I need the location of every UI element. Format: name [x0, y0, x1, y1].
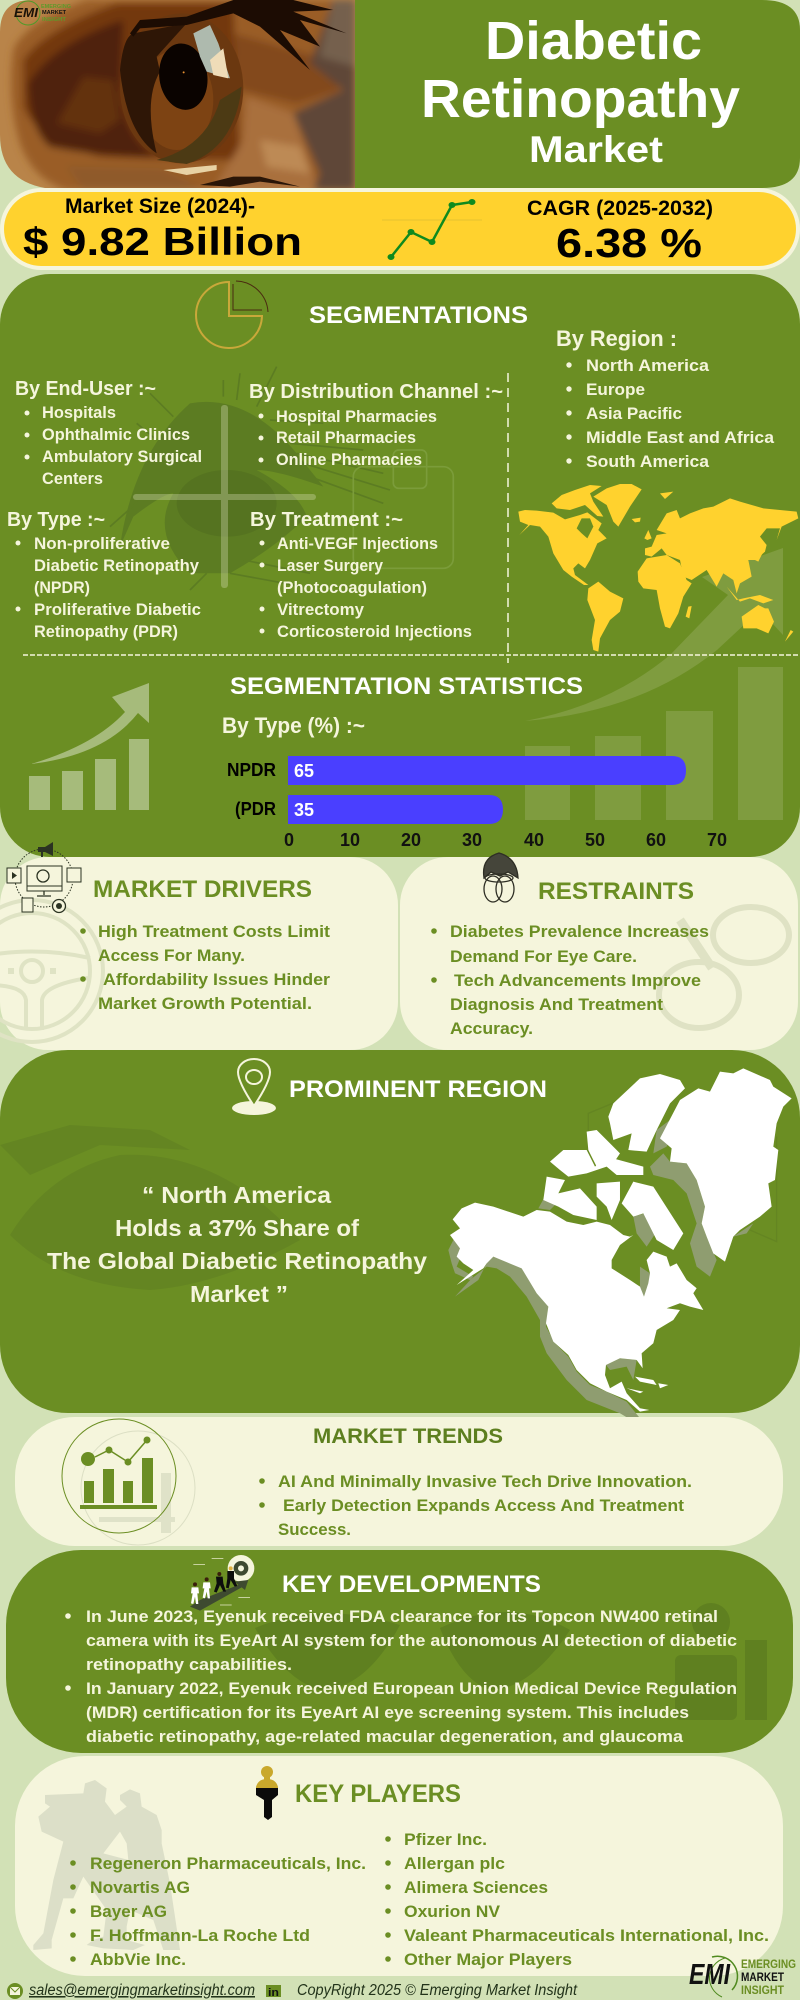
logo: Emerging Market Insight: EMI [689, 1959, 731, 1991]
watermark: steering wheel [0, 900, 103, 1042]
watermark: outlines [588, 1102, 777, 1242]
panel: market trends [15, 1417, 783, 1546]
list: players right column [385, 1830, 769, 1969]
bar chart: by type: 0 [284, 830, 294, 850]
bar chart: by type: 30 [462, 830, 482, 850]
watermark: eyes and bulb [255, 1603, 767, 1720]
icon: pie chart [196, 281, 268, 348]
bar chart: by type: 60 [646, 830, 666, 850]
bar chart: by type: 20 [401, 830, 421, 850]
list: by end-user: Hospitals [42, 403, 116, 422]
icon: growth bars and arrow [29, 683, 149, 810]
list: by type: (NPDR) [34, 578, 90, 597]
list: developments: In January 2022, Eyenuk received European Union Medical Device Regulation [86, 1679, 737, 1698]
list: players left column [70, 1854, 366, 1969]
bar chart: by type: NPDR [227, 760, 276, 780]
heading: segmentations: SEGMENTATIONS [309, 302, 528, 329]
list: by type: Retinopathy (PDR) [34, 622, 178, 641]
small logo on eye image: MARKET [42, 10, 67, 16]
small logo on eye image: INSIGHT [42, 17, 67, 23]
list: trends: Early Detection Expands Access And Treatment [283, 1496, 684, 1515]
list: by distribution channel: Retail Pharmacies [276, 428, 416, 447]
heading: market trends: MARKET TRENDS [313, 1425, 503, 1448]
panel: market size and CAGR banner [0, 188, 800, 270]
CAGR: CAGR (2025-2032) [527, 197, 713, 220]
list: restraints [431, 922, 709, 1038]
small logo on eye image: EMERGING [41, 4, 71, 10]
small logo on eye image: EMI [14, 5, 38, 20]
copyright: CopyRight 2025 © Emerging Market Insight [297, 1982, 578, 1999]
iris highlight [193, 25, 230, 78]
watermark: handcuffs [659, 907, 789, 1028]
list: by treatment: (Photocoagulation) [277, 578, 427, 597]
icon: marketing [7, 842, 81, 912]
panel: key players [15, 1756, 783, 1976]
map: North America [448, 1068, 792, 1418]
list: by type: Diabetic Retinopathy [34, 556, 200, 575]
subheading: by type: By Type (%) :~ [222, 713, 365, 738]
callout: share: Market ” [190, 1281, 288, 1307]
heading: market drivers: MARKET DRIVERS [93, 876, 312, 903]
watermark: eye [0, 1125, 300, 1290]
panel: prominent region [0, 1050, 800, 1418]
bar chart: by type: 70 [707, 830, 727, 850]
watermark: eye [110, 367, 453, 590]
header image: eye photograph [0, 0, 355, 190]
list: by end-user: Ophthalmic Clinics [42, 425, 190, 444]
heading: restraints: RESTRAINTS [538, 878, 694, 905]
list: by treatment: Anti-VEGF Injections [277, 534, 438, 553]
heading: key developments: KEY DEVELOPMENTS [282, 1571, 541, 1598]
icon: people climbing to target [190, 1555, 254, 1611]
list: players right column: Alimera Sciences [404, 1878, 548, 1897]
CAGR: 6.38 % [556, 220, 702, 266]
list: by region: Asia Pacific [586, 404, 682, 423]
list: by distribution channel [249, 381, 503, 469]
list: restraints: Accuracy. [450, 1019, 533, 1038]
icon: bar chart in circle [62, 1419, 195, 1545]
panel: key developments [6, 1550, 793, 1753]
bar chart: by type: (PDR [235, 799, 276, 819]
list: by type: Proliferative Diabetic [34, 600, 201, 619]
logo: Emerging Market Insight [689, 1956, 796, 1997]
list: players right column: Other Major Players [404, 1950, 572, 1969]
title text: Market [529, 129, 663, 170]
list: by type: By Type :~ [7, 509, 105, 531]
list: trends: Success. [278, 1520, 351, 1539]
email address: sales@emergingmarketinsight.com [29, 1982, 255, 1999]
bar chart: by type: 50 [585, 830, 605, 850]
icon: handcuffs [484, 853, 518, 902]
list: by distribution channel: Online Pharmacies [276, 450, 422, 469]
list: by end-user: Ambulatory Surgical [42, 447, 202, 466]
list: by region: Middle East and Africa [586, 428, 775, 447]
world map [518, 484, 798, 652]
list: players right column: Pfizer Inc. [404, 1830, 487, 1849]
map land [450, 1068, 792, 1412]
heading: prominent region: PROMINENT REGION [289, 1076, 547, 1103]
logo: Emerging Market Insight: INSIGHT [741, 1983, 785, 1997]
CAGR [527, 197, 713, 266]
list: by end-user: By End-User :~ [15, 378, 156, 400]
list: by type: Non-proliferative [34, 534, 170, 553]
callout: share: Holds a 37% Share of [115, 1215, 359, 1241]
list: drivers: High Treatment Costs Limit [98, 922, 330, 941]
small logo on eye image [14, 1, 71, 25]
icon: linkedin: in [268, 1987, 279, 1999]
list: developments: retinopathy capabilities. [86, 1655, 292, 1674]
list: trends: AI And Minimally Invasive Tech Drive Innovation. [278, 1472, 692, 1491]
list: players left column: F. Hoffmann-La Roche Ltd [90, 1926, 310, 1945]
list: drivers: Access For Many. [98, 946, 245, 965]
list: by region: By Region : [556, 326, 677, 351]
list: players left column: Bayer AG [90, 1902, 167, 1921]
list: by treatment: Vitrectomy [277, 600, 365, 619]
bar chart: by type: 40 [524, 830, 544, 850]
market size: Market Size (2024)- [65, 195, 255, 218]
icon: linkedin [266, 1985, 281, 1999]
footer: contact and copyright [7, 1982, 578, 1999]
list: restraints: Tech Advancements Improve [454, 971, 701, 990]
bar chart: by type: 65 [294, 761, 314, 781]
list: drivers [80, 922, 330, 1013]
list: developments: In June 2023, Eyenuk received FDA clearance for its Topcon NW400 retinal [86, 1607, 718, 1626]
list: by distribution channel: Hospital Pharmacies [276, 407, 437, 426]
icon: growth line [382, 199, 482, 260]
map shadow [448, 1120, 753, 1418]
market size: $ 9.82 Billion [23, 221, 302, 264]
list: players right column: Valeant Pharmaceuticals International, Inc. [404, 1926, 769, 1945]
watermark: athletes [33, 1780, 180, 1950]
list: drivers: Affordability Issues Hinder [103, 970, 330, 989]
list: by treatment: By Treatment :~ [250, 509, 403, 531]
list: by end-user [15, 378, 202, 488]
list: restraints: Demand For Eye Care. [450, 947, 637, 966]
bar chart: by type: 35 [294, 800, 314, 820]
list: players right column: Oxurion NV [404, 1902, 501, 1921]
list: restraints: Diabetes Prevalence Increases [450, 922, 709, 941]
list: developments [65, 1607, 737, 1746]
list: by treatment [250, 509, 472, 641]
list: by end-user: Centers [42, 469, 103, 488]
list: trends [259, 1472, 692, 1539]
list: players left column: Novartis AG [90, 1878, 190, 1897]
list: players right column: Allergan plc [404, 1854, 505, 1873]
lashes [130, 0, 347, 70]
watermark: arrow swoosh [525, 548, 783, 820]
icon: key [256, 1766, 278, 1820]
iris [120, 13, 243, 163]
panel: restraints [400, 857, 798, 1050]
logo: Emerging Market Insight: MARKET [741, 1970, 785, 1984]
heading: key players: KEY PLAYERS [295, 1780, 461, 1808]
pupil [159, 44, 208, 110]
panel: market drivers [0, 857, 398, 1050]
panel: segmentations and statistics [0, 274, 800, 857]
list: by treatment: Laser Surgery [277, 556, 383, 575]
list: by region: North America [586, 356, 710, 375]
icon: email [7, 1983, 23, 1999]
title text: Retinopathy [421, 69, 740, 129]
list: players left column: Regeneron Pharmaceuticals, Inc. [90, 1854, 366, 1873]
icon: location pin [232, 1059, 276, 1115]
list: players left column: AbbVie Inc. [90, 1950, 186, 1969]
title text: Diabetic [485, 11, 702, 71]
heading: segmentation statistics: SEGMENTATION STATISTICS [230, 673, 583, 700]
dashed dividers [23, 373, 800, 663]
market size [23, 195, 302, 264]
list: restraints: Diagnosis And Treatment [450, 995, 663, 1014]
callout: share [47, 1182, 427, 1307]
list: by distribution channel: By Distribution Channel :~ [249, 381, 503, 403]
panel: title [355, 0, 800, 188]
list: by region: Europe [586, 380, 645, 399]
watermark: cross [133, 405, 316, 588]
bar chart: by type: 10 [340, 830, 360, 850]
list: by region: South America [586, 452, 710, 471]
list: by region [556, 326, 775, 471]
bar chart: by type [227, 756, 727, 850]
list: developments: camera with its EyeArt AI system for the autonomous AI detection of diabetic [86, 1631, 737, 1650]
list: by treatment: Corticosteroid Injections [277, 622, 472, 641]
callout: share: “ North America [142, 1182, 331, 1208]
list: developments: (MDR) certification for its EyeArt AI eye screening system. This includes [86, 1703, 689, 1722]
title text [421, 11, 740, 170]
list: by type [7, 509, 201, 641]
callout: share: The Global Diabetic Retinopathy [47, 1248, 427, 1274]
list: developments: diabetic retinopathy, age-related macular degeneration, and glaucoma [86, 1727, 684, 1746]
list: drivers: Market Growth Potential. [98, 994, 312, 1013]
